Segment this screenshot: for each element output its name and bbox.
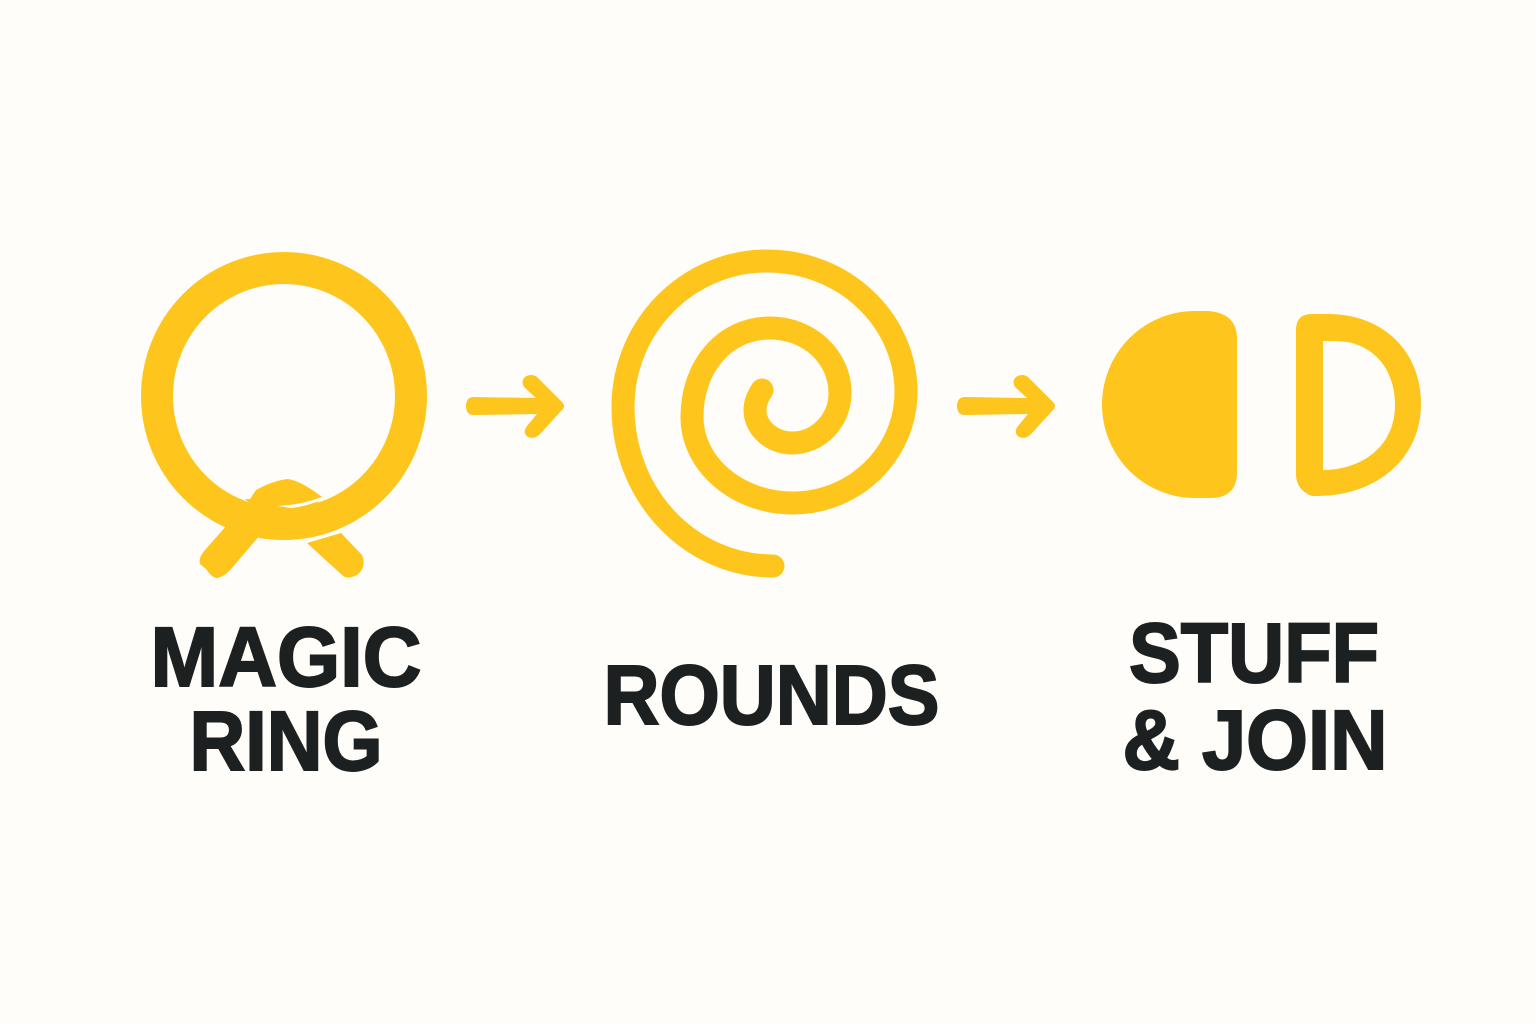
label: magic ring: RING xyxy=(190,694,382,788)
label: stuff and join xyxy=(1122,606,1388,787)
arrow: ring to rounds xyxy=(466,375,564,438)
icon: filled half sphere xyxy=(1102,311,1237,498)
arrow: rounds to stuff and join xyxy=(957,375,1055,438)
label: magic ring: MAGIC xyxy=(150,610,422,704)
label: stuff and join: & JOIN xyxy=(1122,693,1388,787)
icon: spiral rounds xyxy=(623,261,906,566)
icon: outlined half sphere xyxy=(1296,314,1421,496)
label: stuff and join: STUFF xyxy=(1129,606,1379,700)
label: magic ring xyxy=(150,610,422,788)
label: rounds: ROUNDS xyxy=(604,648,940,742)
icon: magic ring xyxy=(157,268,411,578)
